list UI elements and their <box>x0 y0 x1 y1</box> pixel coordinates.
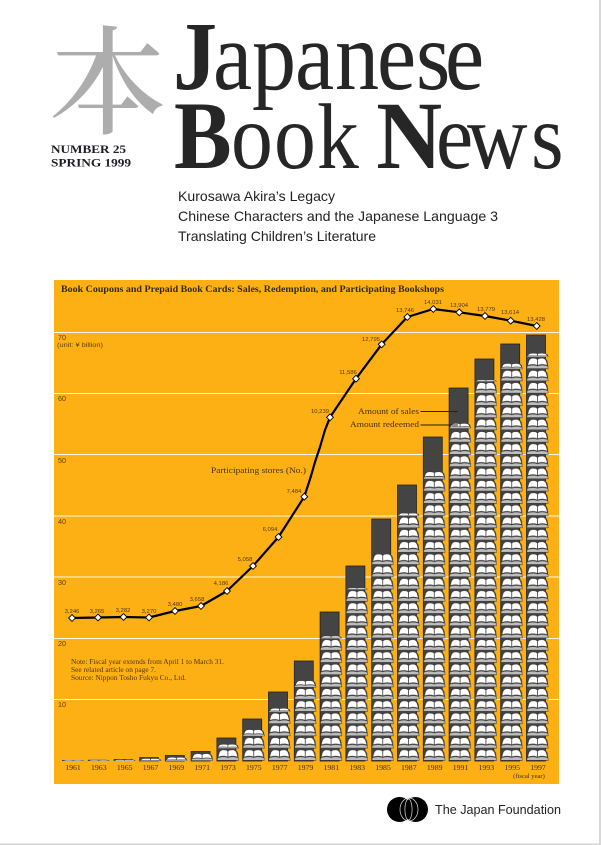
store count value labels: 10,239 <box>311 409 329 415</box>
x axis year labels: 1983 <box>349 763 365 772</box>
title: Japanese Book News masthead: ook <box>231 86 360 189</box>
store count value labels: 4,186 <box>214 581 229 587</box>
bar 1989 <box>423 437 447 761</box>
bar 1987 <box>397 485 421 761</box>
contents list: Translating Children’s Literature <box>178 228 376 244</box>
legend: amount redeemed <box>350 419 458 429</box>
store count value labels: 3,270 <box>142 609 157 615</box>
x axis year labels: 1971 <box>194 763 210 772</box>
x axis year labels: 1993 <box>479 763 494 772</box>
store count value labels: 13,904 <box>450 303 469 309</box>
x axis year labels: 1975 <box>246 763 262 772</box>
store count value labels: 3,480 <box>168 602 183 608</box>
x axis year labels: 1997 <box>530 763 546 772</box>
store count value labels: 13,614 <box>501 310 520 316</box>
icon: Japan Foundation logo <box>387 797 428 822</box>
x axis year labels: 1967 <box>143 763 158 772</box>
x axis year labels <box>65 763 546 780</box>
bar 1975 <box>242 719 266 761</box>
store count value labels: 7,484 <box>287 489 302 495</box>
store count value labels: 13,428 <box>527 317 546 323</box>
store count value labels: 5,058 <box>238 557 253 563</box>
y axis labels: 20 <box>58 639 66 648</box>
x axis year labels: 1979 <box>298 763 313 772</box>
x axis year labels: 1985 <box>375 763 391 772</box>
note and source: Note: Fiscal year extends from April 1 to March 31. <box>71 659 224 666</box>
bar 1993 <box>474 359 498 761</box>
bar 1971 <box>191 752 213 761</box>
contents list <box>178 188 498 244</box>
title: Japanese Book News masthead: J <box>173 3 217 111</box>
x axis year labels: 1991 <box>453 763 468 772</box>
bar 1963 <box>88 760 110 761</box>
store count value labels: 3,658 <box>190 597 205 603</box>
note and source <box>71 659 224 682</box>
x axis year labels: 1977 <box>272 763 288 772</box>
bar 1967 <box>140 758 162 761</box>
bar 1979 <box>294 661 318 761</box>
issue number and date: SPRING 1999 <box>51 156 131 170</box>
bar 1973 <box>216 738 240 761</box>
x axis year labels: (fiscal year) <box>513 773 545 780</box>
y axis labels: (unit: ¥ billion) <box>57 342 103 349</box>
title: Japanese Book News masthead <box>173 3 564 190</box>
contents list: Kurosawa Akira’s Legacy <box>178 188 335 204</box>
store count value labels: 3,282 <box>116 608 130 614</box>
bar 1969 <box>165 756 187 761</box>
bar 1997 <box>526 335 550 761</box>
bar 1983 <box>345 566 369 761</box>
note and source: See related article on page 7. <box>71 667 156 674</box>
bar chart: sales and redeemed amounts <box>62 335 550 761</box>
x axis year labels: 1961 <box>65 763 81 772</box>
x axis year labels: 1989 <box>427 763 443 772</box>
y axis labels: 60 <box>58 394 66 403</box>
store count value labels: 14,031 <box>424 300 442 306</box>
line chart: participating stores <box>69 306 540 621</box>
line label: participating stores: Participating stores (No.) <box>211 465 306 475</box>
bar 1977 <box>268 692 292 761</box>
y axis labels: 50 <box>58 456 66 465</box>
store count value labels: 12,795 <box>362 337 381 343</box>
y axis labels: 70 <box>58 333 66 342</box>
chart title: Book Coupons and Prepaid Book Cards: Sales, Redemption, and Participating Bookshops <box>61 285 444 295</box>
x axis year labels: 1981 <box>324 763 339 772</box>
x axis year labels: 1973 <box>220 763 236 772</box>
y axis labels: 10 <box>58 700 66 709</box>
x axis year labels: 1995 <box>504 763 520 772</box>
store count value labels: 3,265 <box>90 609 105 615</box>
x axis year labels: 1963 <box>91 763 107 772</box>
store count value labels: 11,586 <box>339 370 358 376</box>
bar 1991 <box>449 388 473 761</box>
x axis year labels: 1965 <box>117 763 133 772</box>
legend: amount redeemed: Amount redeemed <box>350 419 420 429</box>
footer: The Japan Foundation: The Japan Foundation <box>435 802 561 817</box>
legend: amount of sales <box>358 406 458 416</box>
title: Japanese Book News masthead: apanese <box>213 3 484 111</box>
store count value labels: 3,246 <box>65 609 80 615</box>
contents list: Chinese Characters and the Japanese Language 3 <box>178 208 498 224</box>
x axis year labels: 1987 <box>401 763 417 772</box>
store count value labels: 13,779 <box>477 307 495 313</box>
store count value labels: 13,746 <box>396 308 415 314</box>
store count value labels: 6,094 <box>263 527 278 533</box>
x axis year labels: 1969 <box>169 763 184 772</box>
y axis labels: 40 <box>58 517 66 526</box>
issue number and date <box>51 142 131 170</box>
y axis labels: 30 <box>58 578 66 587</box>
issue number and date: NUMBER 25 <box>51 142 126 156</box>
bar 1985 <box>371 519 395 761</box>
title: Japanese Book News masthead: B <box>174 83 232 189</box>
title: Japanese Book News masthead: N <box>376 84 442 190</box>
bar 1965 <box>114 759 136 761</box>
legend: amount of sales: Amount of sales <box>358 406 420 416</box>
title: Japanese Book News masthead: ews <box>436 86 564 189</box>
bar 1995 <box>500 344 524 761</box>
note and source: Source: Nippon Tosho Fukyu Co., Ltd. <box>71 675 186 682</box>
bar 1981 <box>320 612 344 761</box>
bar 1961 <box>62 760 84 761</box>
store count value labels <box>65 300 546 615</box>
panel: chart background <box>54 280 559 784</box>
y axis labels <box>57 333 103 709</box>
